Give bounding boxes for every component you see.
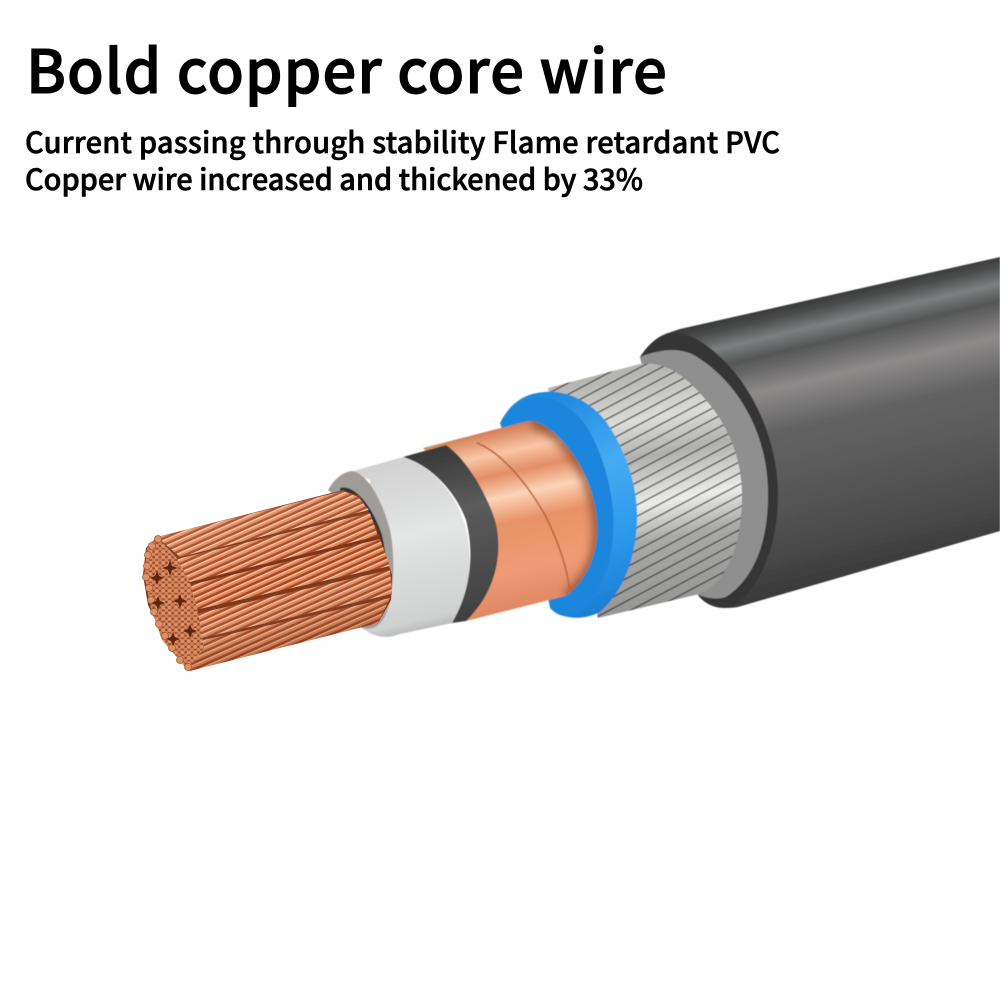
black insulation band — [403, 445, 498, 623]
outer jacket — [640, 257, 1000, 608]
strand backing — [143, 490, 392, 671]
subtitle text block: Copper wire increased and thickened by 33% — [25, 157, 643, 199]
strand 2 — [173, 513, 378, 582]
jacket dark end ring — [640, 333, 778, 608]
grey end ring — [328, 471, 393, 629]
white insulation band — [350, 457, 470, 637]
dark core hole — [340, 488, 386, 630]
bundle shading — [157, 490, 392, 671]
subtitle text block — [25, 120, 780, 199]
grey inner ring — [640, 350, 768, 598]
strand 5 — [190, 598, 390, 671]
copper strand bundle — [142, 490, 392, 671]
dark gaps between strands — [150, 560, 197, 646]
tape seam — [477, 443, 570, 594]
strand 3 — [186, 539, 390, 610]
blue ring — [500, 392, 637, 618]
cable sheath layers — [328, 257, 1000, 637]
subtitle text block: Current passing through stability Flame retardant PVC — [25, 120, 780, 162]
strand 4 — [195, 570, 392, 638]
silver armour wires — [548, 363, 742, 618]
strand 1 — [157, 491, 369, 557]
illustration: layered cable cross-section — [142, 257, 1000, 671]
copper tape — [423, 421, 600, 621]
lumpy end outline — [142, 536, 192, 670]
title: Bold copper core wire — [26, 24, 667, 111]
strand end faces — [144, 537, 204, 670]
